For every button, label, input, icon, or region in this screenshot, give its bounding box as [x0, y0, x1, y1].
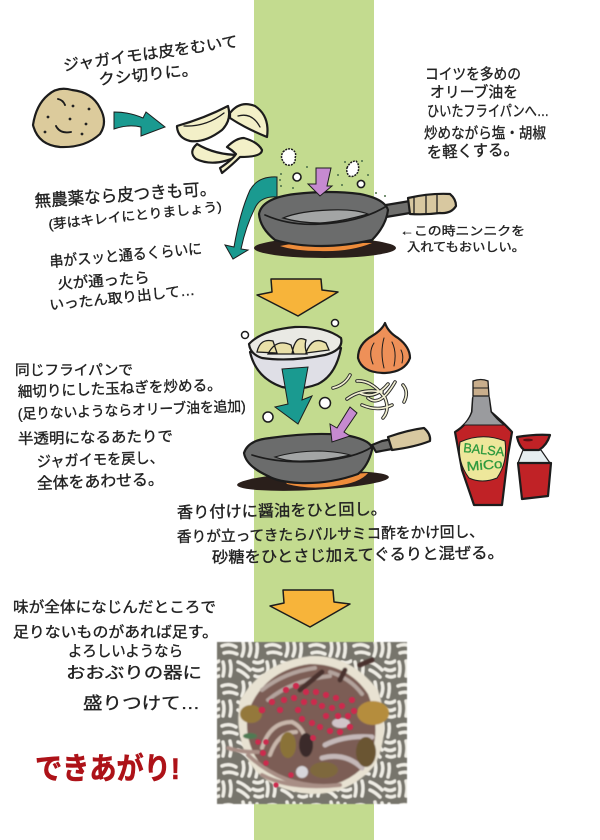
icon: potato [33, 89, 104, 147]
icon: bowl of potatoes [242, 320, 341, 388]
title: dekiagari: できあがり! [35, 752, 180, 786]
text: final seasoning: 盛りつけて… [83, 694, 200, 713]
text: garlic note [400, 224, 525, 254]
icon: potato wedges [177, 104, 268, 173]
text: peel the potato: クシ切りに。 [98, 61, 199, 89]
text: step onions: 全体をあわせる。 [37, 471, 164, 493]
text: step onions [15, 362, 246, 493]
text: garlic note: ←この時ニンニクを [400, 224, 525, 238]
green centre band [254, 0, 374, 840]
text: fry instructions: ひいたフライパンへ… [427, 103, 549, 120]
arrow: potato to wedges [114, 112, 165, 136]
text: fry instructions: コイツを多めの [425, 65, 521, 83]
text: step onions: 半透明になるあたりで [18, 428, 173, 448]
icon: balsamico bottle: BALSA [463, 440, 505, 459]
icon: balsamico bottle: MiCo [466, 456, 503, 474]
arrow: orange down 2 [270, 590, 350, 627]
text: seasoning instructions [177, 500, 504, 567]
icon: steam puffs [279, 149, 386, 197]
icon: onion [358, 323, 410, 373]
text: skewer note: 火が通ったら [57, 270, 150, 293]
icon: frying pan 1 [254, 192, 456, 258]
arrow: teal down into pan 2 [275, 367, 312, 424]
text: skewer note [49, 241, 203, 313]
text: fry instructions: 炒めながら塩・胡椒 [424, 125, 546, 142]
text: step onions: 同じフライパンで [15, 362, 133, 378]
arrow: pink down into pan 1 [308, 168, 332, 196]
text: final seasoning [13, 599, 218, 713]
text: peel the potato: ジャガイモは皮をむいて [62, 33, 239, 75]
text: final seasoning: おおぶりの器に [66, 664, 202, 682]
text: seasoning instructions: 砂糖をひとさじ加えてぐるりと混ぜる。 [212, 544, 504, 567]
text: peel the potato [62, 33, 239, 89]
icon: small sauce bottle [517, 435, 551, 499]
text: organic note: (芽はキレイにとりましょう) [48, 199, 222, 232]
text: final seasoning: よろしいようなら [68, 643, 183, 660]
text: seasoning instructions: 香り付けに醤油をひと回し。 [177, 500, 387, 522]
text: final seasoning: 足りないものがあれば足す。 [13, 624, 218, 641]
text: organic note [34, 179, 222, 232]
arrow: orange down 1 [257, 279, 338, 316]
text: skewer note: いったん取り出して… [49, 282, 196, 313]
text: final seasoning: 味が全体になじんだところで [13, 599, 216, 616]
arrow: pink to pan 2 [330, 407, 357, 442]
text: step onions: (足りないようならオリーブ油を追加) [18, 397, 246, 423]
icon: steam puffs 2 [263, 398, 330, 422]
text: step onions: ジャガイモを戻し、 [37, 450, 164, 471]
text: step onions: 細切りにした玉ねぎを炒める。 [18, 377, 222, 401]
text: fry instructions: オリーブ油を [430, 83, 518, 101]
text: organic note: 無農薬なら皮つきも可。 [34, 179, 217, 211]
text: seasoning instructions: 香りが立ってきたらバルサミコ酢をかけ回し、 [177, 524, 484, 546]
arrow: teal down to the left [225, 177, 277, 259]
text: fry instructions [424, 65, 549, 162]
icon: frying pan 2 [237, 428, 430, 494]
photo: finished dish [217, 642, 407, 804]
text: fry instructions: を軽くする。 [427, 141, 519, 162]
text: skewer note: 串がスッと通るくらいに [49, 241, 203, 271]
icon: balsamico bottle [455, 380, 512, 505]
text: garlic note: 入れてもおいしい。 [407, 240, 525, 254]
icon: sliced onion [333, 375, 406, 418]
